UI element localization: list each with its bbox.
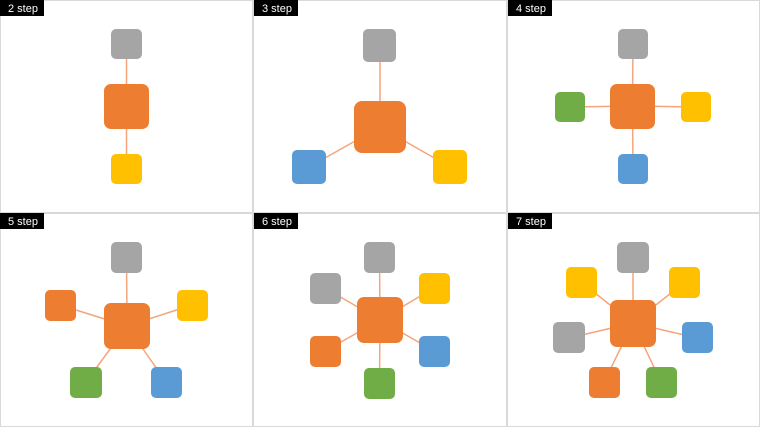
label: 4 step: 4 step [516, 3, 546, 15]
panel: 4 step [508, 0, 711, 184]
panel: 7 step [508, 213, 713, 398]
label: 4 step [508, 0, 552, 16]
panel: 6 step [254, 213, 450, 399]
label: 3 step: 3 step [262, 3, 292, 15]
panel: 2 step [0, 0, 149, 184]
label: 3 step [254, 0, 298, 16]
label: 5 step: 5 step [8, 216, 38, 228]
label: 2 step [0, 0, 44, 16]
label: 2 step: 2 step [8, 3, 38, 15]
panel: 5 step [0, 213, 208, 398]
label: 5 step [0, 213, 44, 229]
label: 7 step [508, 213, 552, 229]
label: 6 step [254, 213, 298, 229]
label: 6 step: 6 step [262, 216, 292, 228]
panel: 3 step [254, 0, 467, 184]
label: 7 step: 7 step [516, 216, 546, 228]
